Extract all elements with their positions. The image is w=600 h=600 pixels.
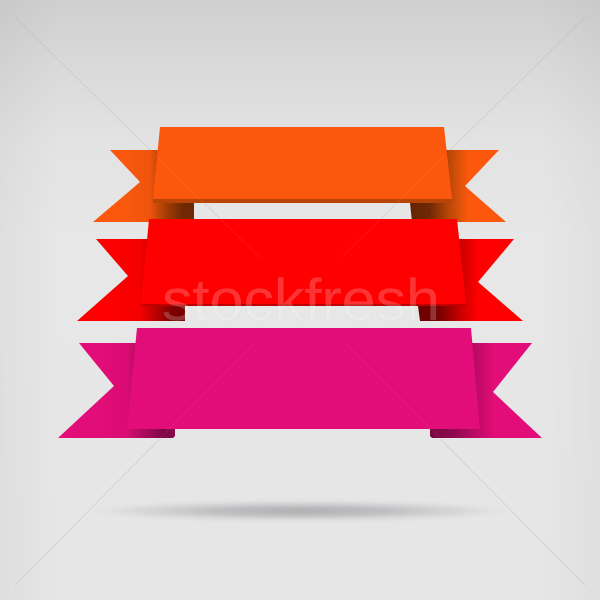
floor shadow	[74, 500, 526, 522]
main band	[127, 328, 480, 429]
left tail	[77, 239, 185, 321]
right tail	[430, 343, 542, 438]
bottom fold edge	[141, 304, 466, 306]
right tail	[410, 150, 506, 222]
main band	[153, 127, 452, 199]
bottom fold edge	[153, 199, 452, 203]
left tail	[93, 150, 194, 222]
watermark: text: stockfresh	[162, 268, 440, 333]
ribbon: red	[77, 219, 523, 321]
watermark: lines over ribbons	[155, 155, 445, 443]
right tail	[418, 239, 523, 321]
ribbon: orange	[93, 127, 506, 222]
ribbon: magenta	[58, 328, 542, 438]
main band	[141, 219, 466, 304]
left tail	[58, 343, 175, 438]
